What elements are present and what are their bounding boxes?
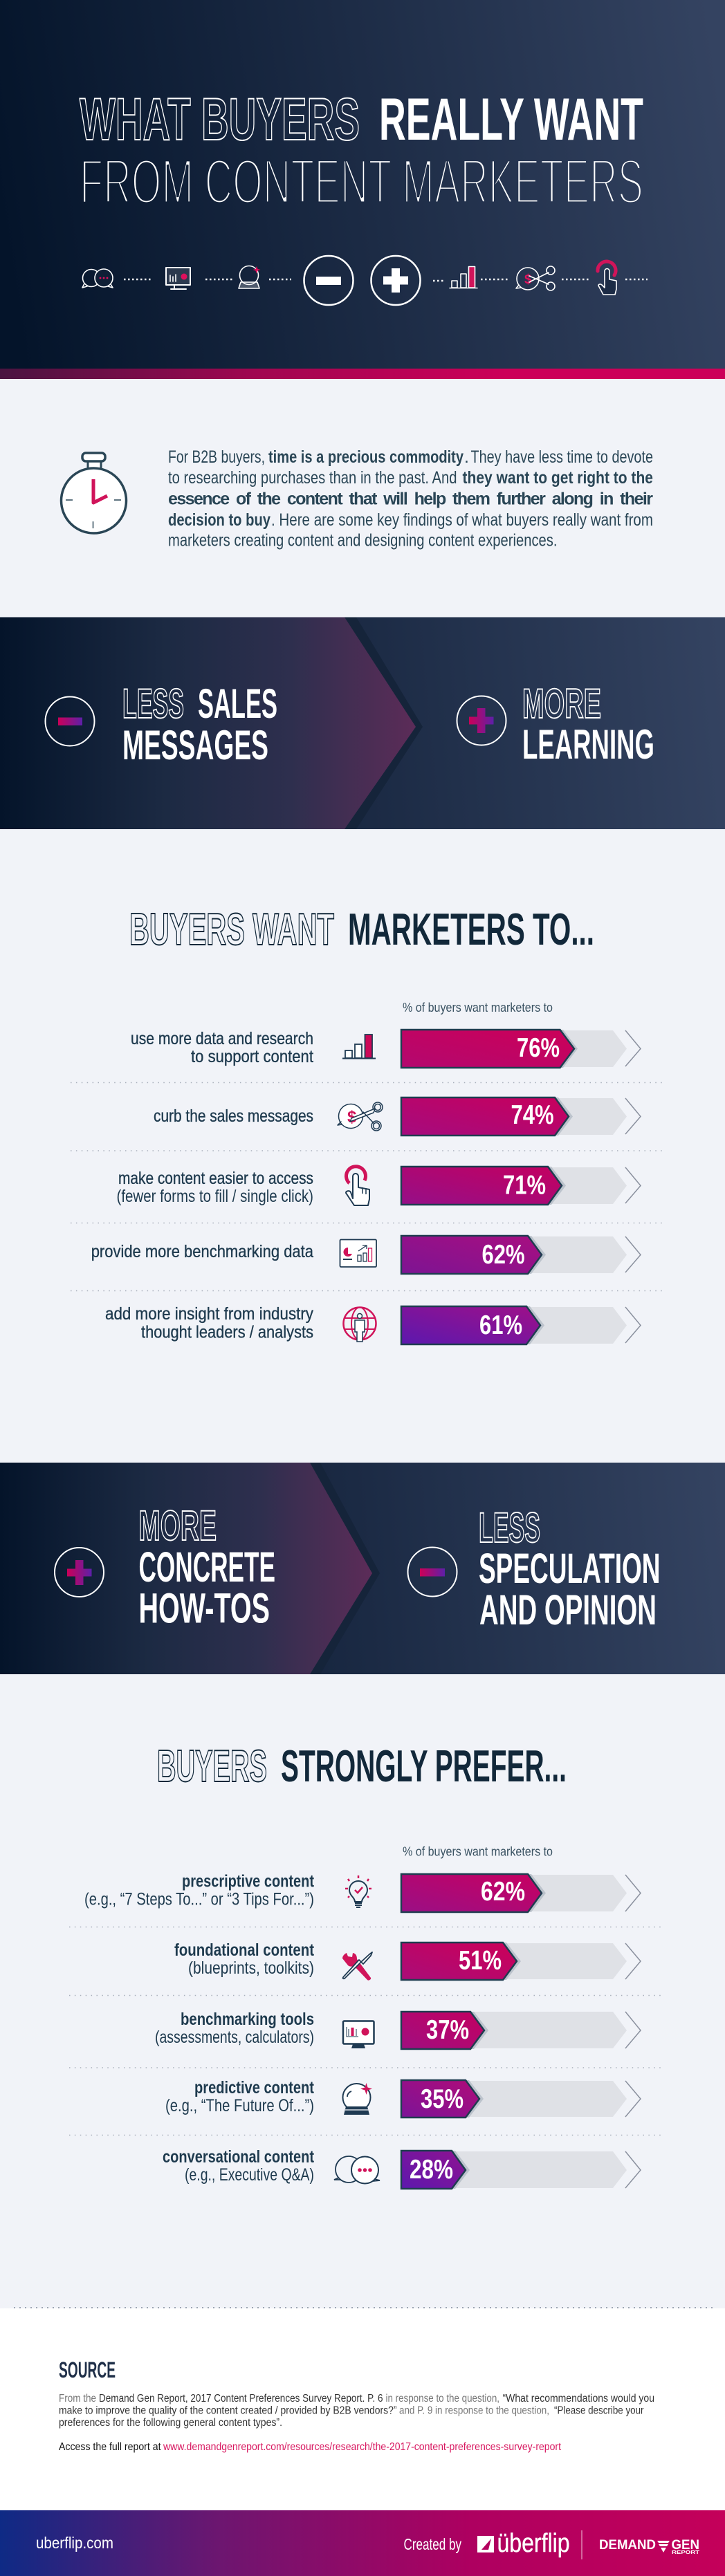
footer url: uberflip.com bbox=[36, 2534, 113, 2552]
icon: plus circle bbox=[371, 256, 421, 305]
text block: intro paragraph: to researching purchases than in the past. And bbox=[168, 468, 457, 488]
dotted connectors bbox=[124, 279, 648, 281]
title: WHAT BUYERS bbox=[80, 86, 360, 153]
logo: demand gen report: DEMAND bbox=[599, 2538, 656, 2552]
heading: more concrete how-tos: HOW-TOS bbox=[138, 1585, 270, 1632]
heading: more learning: MORE bbox=[522, 680, 601, 727]
row: 74% curb sales messages: curb the sales messages bbox=[154, 1106, 313, 1126]
row: 61% insight from analysts: 61% bbox=[479, 1310, 522, 1340]
row: 61% insight from analysts: add more insight from industry bbox=[105, 1304, 313, 1324]
row: 35% predictive content: predictive content bbox=[194, 2078, 315, 2097]
heading: buyers strongly prefer bbox=[157, 1741, 567, 1791]
row: 62% benchmarking data: 62% bbox=[481, 1240, 524, 1270]
heading: buyers strongly prefer: BUYERS bbox=[157, 1741, 267, 1791]
text block: source note: “Please describe your bbox=[554, 2405, 643, 2416]
row: 74% curb sales messages: $ bbox=[347, 1108, 357, 1127]
text block: source note: in response to the question, bbox=[386, 2393, 499, 2404]
heading: source: SOURCE bbox=[59, 2357, 116, 2382]
text block: intro paragraph: . Here are some key findings of what buyers really want from bbox=[271, 510, 653, 530]
row: 76% data and research: 76% bbox=[517, 1033, 560, 1063]
text block: intro paragraph: For B2B buyers, bbox=[168, 447, 265, 467]
row: 62% benchmarking data bbox=[91, 1236, 641, 1274]
row: 28% conversational content: conversational content bbox=[163, 2147, 315, 2167]
text block: source note: From the bbox=[59, 2393, 96, 2404]
chart caption: % of buyers want marketers to bbox=[403, 1845, 553, 1859]
heading: less speculation and opinion: LESS bbox=[479, 1504, 540, 1551]
row: 35% predictive content: 35% bbox=[421, 2084, 464, 2114]
row: 37% benchmarking tools: (assessments, calculators) bbox=[155, 2028, 314, 2047]
row: 62% prescriptive content: prescriptive content bbox=[182, 1871, 315, 1891]
text block: intro paragraph: marketers creating content and designing content experiences. bbox=[168, 531, 558, 550]
chart: buyers strongly prefer bbox=[69, 1845, 663, 2189]
row: 62% benchmarking data: provide more benchmarking data bbox=[91, 1242, 313, 1261]
row: 37% benchmarking tools: 37% bbox=[426, 2015, 469, 2045]
row: 51% foundational content bbox=[174, 1940, 641, 1981]
heading: more learning bbox=[522, 680, 654, 768]
heading: more concrete how-tos: MORE bbox=[138, 1502, 217, 1549]
heading: more concrete how-tos bbox=[138, 1502, 275, 1632]
row: 74% curb sales messages: 74% bbox=[511, 1100, 553, 1130]
panel: header bbox=[0, 0, 725, 379]
row: 28% conversational content bbox=[163, 2147, 641, 2189]
icon: crystal ball bbox=[239, 266, 260, 288]
row: 51% foundational content: 51% bbox=[459, 1946, 502, 1975]
icon: minus circle bbox=[304, 256, 353, 305]
heading: less sales messages bbox=[122, 680, 277, 768]
text block: source note: preferences for the following general content types”. bbox=[59, 2417, 282, 2429]
text block: intro paragraph: decision to buy bbox=[168, 510, 270, 530]
row: 62% prescriptive content: 62% bbox=[481, 1877, 525, 1907]
logo: uberflip: überflip bbox=[497, 2529, 570, 2558]
chart: buyers want marketers to bbox=[71, 1001, 665, 1344]
panel: more concrete how-tos / less speculation bbox=[0, 1463, 725, 1674]
panel: source bbox=[0, 2308, 725, 2510]
text block: intro paragraph: They have less time to devote bbox=[470, 447, 653, 467]
panel: less sales messages / more learning bbox=[0, 617, 725, 829]
created by: Created by bbox=[404, 2535, 461, 2553]
row: 35% predictive content bbox=[165, 2078, 641, 2118]
row: 61% insight from analysts bbox=[105, 1304, 641, 1344]
icon: scissors bbox=[516, 266, 555, 290]
heading: less speculation and opinion bbox=[479, 1504, 660, 1633]
row: 76% data and research: use more data and research bbox=[131, 1029, 313, 1048]
text block: source note bbox=[59, 2393, 654, 2429]
icon: stopwatch bbox=[61, 453, 126, 533]
title bbox=[80, 86, 643, 217]
panel: intro bbox=[61, 447, 653, 550]
text block: intro paragraph: time is a precious commodity bbox=[268, 447, 464, 467]
row: 35% predictive content: (e.g., “The Future Of...”) bbox=[165, 2096, 314, 2115]
icon row bbox=[82, 256, 648, 305]
icon: minus circle bbox=[46, 697, 94, 745]
icon: scissors: $ bbox=[524, 272, 532, 287]
row: 74% curb sales messages bbox=[154, 1097, 641, 1136]
text block: intro paragraph bbox=[168, 447, 653, 550]
row: 37% benchmarking tools: benchmarking tools bbox=[181, 2010, 314, 2029]
icon: bar chart bbox=[450, 267, 477, 288]
row: 71% easier to access bbox=[116, 1167, 641, 1206]
logo: demand gen report: GEN bbox=[671, 2538, 699, 2552]
heading: less sales messages: SALES bbox=[198, 680, 277, 727]
text block: report link: www.demandgenreport.com/resources/research/the-2017-content-preferences-survey-report bbox=[163, 2441, 562, 2453]
row: 51% foundational content: foundational content bbox=[174, 1940, 315, 1960]
panel: footer bbox=[0, 2510, 725, 2576]
logo: demand gen report bbox=[599, 2538, 700, 2555]
text block: intro paragraph: . bbox=[464, 447, 469, 467]
heading: more concrete how-tos: CONCRETE bbox=[138, 1544, 275, 1591]
chart caption: % of buyers want marketers to bbox=[403, 1001, 553, 1014]
icon: plus circle bbox=[55, 1548, 104, 1597]
row: 76% data and research: to support content bbox=[191, 1047, 313, 1066]
heading: less sales messages: LESS bbox=[122, 680, 184, 727]
text block: source note: “What recommendations would you bbox=[502, 2393, 654, 2404]
icon: plus circle bbox=[457, 696, 506, 745]
row: 28% conversational content: (e.g., Executive Q&A) bbox=[185, 2165, 314, 2185]
text block: report link: Access the full report at bbox=[59, 2441, 161, 2453]
icon: speech bubbles bbox=[82, 269, 113, 288]
row: 76% data and research bbox=[131, 1029, 641, 1068]
text block: source note: Demand Gen Report, 2017 Content Preferences Survey Report. P. 6 bbox=[99, 2393, 383, 2404]
row: 37% benchmarking tools bbox=[155, 2010, 641, 2049]
row: 71% easier to access: 71% bbox=[503, 1170, 546, 1201]
text block: source note: and P. 9 in response to the question, bbox=[399, 2405, 549, 2416]
text block: source note: make to improve the quality of the content created / provided by B2B vendors?” bbox=[59, 2405, 397, 2416]
icon: monitor bbox=[166, 268, 190, 289]
row: 61% insight from analysts: thought leaders / analysts bbox=[141, 1322, 313, 1342]
row: 51% foundational content: (blueprints, toolkits) bbox=[188, 1958, 314, 1978]
row: 71% easier to access: (fewer forms to fill / single click) bbox=[116, 1187, 313, 1206]
icon: hand click bbox=[598, 261, 616, 295]
row: 62% prescriptive content bbox=[84, 1871, 641, 1912]
heading: less sales messages: MESSAGES bbox=[122, 722, 268, 768]
row: 28% conversational content: 28% bbox=[410, 2155, 453, 2185]
text block: intro paragraph: essence of the content that will help them further along in their bbox=[168, 490, 653, 509]
heading: buyers want marketers to: BUYERS WANT bbox=[129, 904, 334, 954]
icon: minus circle bbox=[408, 1548, 457, 1596]
logo: uberflip bbox=[477, 2529, 570, 2558]
row: 62% prescriptive content: (e.g., “7 Steps To...” or “3 Tips For...”) bbox=[84, 1889, 314, 1909]
text block: intro paragraph: they want to get right to the bbox=[462, 468, 653, 488]
row: 71% easier to access: make content easier to access bbox=[118, 1169, 313, 1188]
logo: demand gen report: REPORT bbox=[672, 2550, 700, 2555]
